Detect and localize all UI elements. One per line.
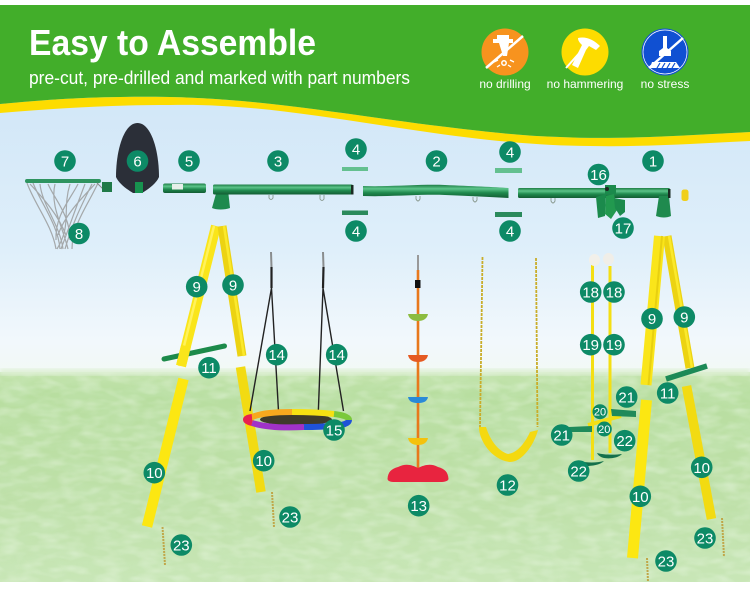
number 16: 16 <box>590 167 607 184</box>
number 1 <box>642 150 664 172</box>
left A-frame: upper tube 9 <box>179 226 216 366</box>
green header band <box>0 5 750 138</box>
part: disc swing 13 <box>388 255 448 482</box>
part: beam 2 <box>363 185 508 202</box>
number 19 b <box>603 334 625 356</box>
number 11 a: 11 <box>201 360 217 377</box>
number 23 c: 23 <box>658 554 674 570</box>
number 17: 17 <box>615 220 631 238</box>
right A-frame: lower tube 10 right <box>686 386 712 519</box>
part: sleeve 4 bottom left <box>342 210 368 215</box>
number 5 <box>178 150 200 172</box>
number 19 a <box>580 334 602 356</box>
number 14 b: 14 <box>328 347 345 364</box>
right A-frame: crossbar 11 <box>666 366 707 379</box>
right A-frame: upper tube 9 right <box>667 236 692 368</box>
number 9 a: 9 <box>193 279 201 296</box>
number 3: 3 <box>274 154 282 170</box>
number 23 b <box>279 506 301 528</box>
number 20 a <box>592 404 608 419</box>
number 15 <box>323 419 345 441</box>
number 21 a: 21 <box>618 390 635 406</box>
part: nest swing ropes 14 <box>250 252 344 420</box>
number 13 <box>408 495 430 516</box>
part: nest swing 15 <box>246 412 349 427</box>
left A-frame: lower tube 10 right <box>240 367 261 492</box>
number 1: 1 <box>649 154 657 170</box>
part: sleeve 4 top left <box>342 167 368 171</box>
number 6 <box>127 150 148 172</box>
number 18 a: 18 <box>582 284 599 302</box>
part: connector tube 5 <box>163 184 206 193</box>
number 2: 2 <box>432 154 441 170</box>
number 4 bottom left: 4 <box>352 224 360 240</box>
number 20 b <box>597 422 612 436</box>
ground anchor 23 second <box>272 492 274 527</box>
number 11 b <box>657 382 678 404</box>
number 10 c <box>630 486 651 507</box>
number 4 top left: 4 <box>352 142 360 158</box>
part: glider crossbar 20 <box>588 416 621 425</box>
part: basketball hoop and net <box>25 179 112 249</box>
grass background <box>0 369 750 582</box>
part: beam 1 <box>518 188 671 218</box>
part: yellow end cap <box>682 190 688 201</box>
number 22 b: 22 <box>570 464 587 480</box>
number 6: 6 <box>133 154 142 170</box>
right A-frame: upper tube 9 left <box>646 236 662 385</box>
sky background <box>0 100 750 376</box>
subtitle: pre-cut, pre-drilled and marked with part numbers <box>29 68 410 88</box>
number 4 bottom right: 4 <box>506 224 514 240</box>
part: backboard <box>116 123 159 193</box>
number 9 c <box>641 308 663 330</box>
number 22 b <box>568 460 590 482</box>
number 23 a <box>170 534 192 556</box>
number 23 d <box>694 527 716 549</box>
number 21 b: 21 <box>553 428 570 444</box>
part: sleeve 4 bottom right <box>495 212 522 217</box>
left A-frame: lower tube 10 <box>147 379 184 526</box>
number 7 <box>54 150 76 172</box>
number 9 d <box>674 306 695 328</box>
part: swing bracket 16 and 17 <box>596 185 625 219</box>
number 20 b: 20 <box>598 424 610 436</box>
number 16 <box>588 164 609 185</box>
number 23 d: 23 <box>697 530 713 548</box>
number 14 a <box>266 344 288 366</box>
number 8 <box>68 223 90 244</box>
number 10 a <box>144 462 165 484</box>
number 10 d <box>691 456 712 478</box>
number 19 b: 19 <box>606 337 622 354</box>
number 7: 7 <box>61 154 69 170</box>
part: glider foot 22 right <box>597 453 622 458</box>
number 9 c: 9 <box>648 311 656 328</box>
number 4 bottom right <box>499 220 521 242</box>
number 4 top left <box>345 138 367 160</box>
title: Easy to Assemble <box>29 22 316 63</box>
number 10 b: 10 <box>255 453 272 470</box>
number 11 b: 11 <box>660 386 675 402</box>
number 23 c <box>655 550 677 572</box>
ground anchor 23 centre <box>647 558 648 582</box>
number 21 a <box>616 386 638 408</box>
number 8: 8 <box>75 226 83 243</box>
number 12: 12 <box>499 478 516 494</box>
number 9 b: 9 <box>229 278 237 294</box>
number 14 a: 14 <box>268 347 285 364</box>
label: no hammering: no hammering <box>547 77 623 91</box>
number 18 b: 18 <box>606 284 622 302</box>
number 9 a <box>186 276 208 298</box>
part: glider foot 22 left <box>580 461 604 466</box>
left A-frame: overlap of tube 9 on crossbar <box>181 346 186 366</box>
part: belt swing 12 <box>479 257 538 462</box>
number 12 <box>497 474 518 496</box>
label: no stress: no stress <box>641 77 689 91</box>
number 10 b <box>253 450 274 472</box>
number 18 a <box>580 281 602 303</box>
number 10 c: 10 <box>632 489 649 506</box>
number 10 d: 10 <box>693 460 710 477</box>
number 22 a <box>614 430 636 452</box>
number 14 b <box>326 344 348 366</box>
part: glider rods 18 and 19 <box>589 253 614 460</box>
icon: no drilling <box>482 28 528 76</box>
number 20 a: 20 <box>594 406 606 418</box>
number 3 <box>267 150 289 172</box>
ground anchor 23 right <box>722 518 724 557</box>
number 19 a: 19 <box>582 337 599 354</box>
part: beam 3 <box>212 184 354 210</box>
number 13: 13 <box>410 498 427 515</box>
ground anchor 23 left <box>162 527 165 565</box>
number 15: 15 <box>326 422 342 440</box>
part: sleeve 4 top right <box>495 168 522 173</box>
number 9 b <box>222 274 244 296</box>
number 4 bottom left <box>345 220 367 242</box>
icon: no stress <box>642 28 688 76</box>
number 17 <box>612 217 634 239</box>
number 4 top right <box>499 141 521 163</box>
label: no drilling: no drilling <box>479 77 531 91</box>
right A-frame: lower tube 10 left <box>632 400 646 558</box>
number 9 d: 9 <box>680 310 688 326</box>
left A-frame: upper tube 9 right <box>222 226 244 356</box>
number 4 top right: 4 <box>506 144 514 162</box>
number 18 b <box>603 281 625 303</box>
number 5: 5 <box>185 154 193 170</box>
number 21 b <box>551 424 572 446</box>
number 11 a <box>198 357 220 379</box>
number 10 a: 10 <box>146 465 163 482</box>
part: glider seat 21 left <box>568 426 592 432</box>
number 23 b: 23 <box>282 510 298 526</box>
left A-frame: crossbar 11 <box>164 346 224 359</box>
icon: no hammering <box>562 28 608 76</box>
number 22 a: 22 <box>616 433 633 450</box>
part: glider seat 21 right <box>611 409 636 417</box>
yellow wave stripe <box>0 97 750 146</box>
number 2 <box>426 150 447 172</box>
number 23 a: 23 <box>173 538 190 554</box>
white bottom margin <box>0 582 750 591</box>
